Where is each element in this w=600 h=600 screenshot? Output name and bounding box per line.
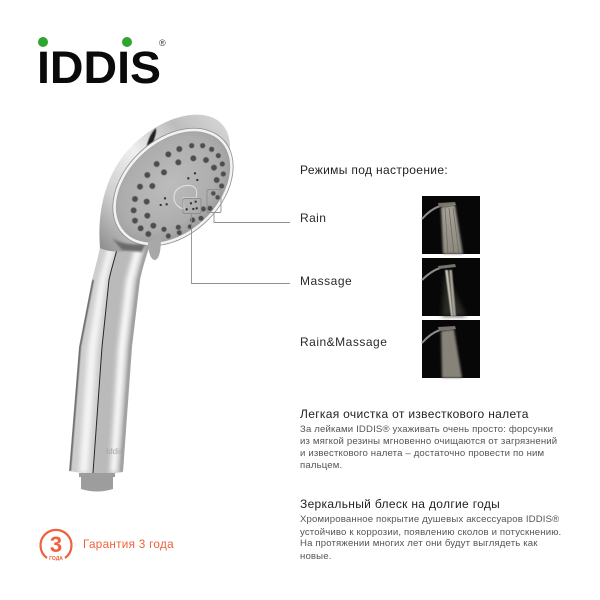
modes heading: Режимы под настроение: [300, 163, 448, 177]
photo: massage mode [422, 258, 480, 316]
section: easy cleaning: пальцем. [300, 460, 342, 471]
selector outline [174, 185, 197, 209]
photo: rain mode [422, 196, 480, 254]
warranty badge: ГОДА [49, 556, 63, 562]
section: mirror shine: Хромированное покрытие душевых аксессуаров IDDIS® [300, 514, 559, 525]
label: Rain: Rain [300, 211, 326, 225]
label: Massage: Massage [300, 274, 352, 288]
section: mirror shine: Зеркальный блеск на долгие годы [300, 497, 500, 511]
section: easy cleaning: и известкового налета – достаточно провести по ним [300, 448, 544, 459]
label: Rain&Massage: Rain&Massage [300, 335, 387, 349]
photo: rain and massage mode [422, 320, 480, 378]
section: mirror shine [300, 497, 564, 562]
section: mirror shine: устойчиво к коррозии, появлению сколов и потускнению. [300, 527, 561, 538]
nozzles [131, 143, 226, 239]
small jets [159, 172, 198, 210]
mode switch tab [148, 236, 161, 260]
section: mirror shine: новые. [300, 551, 332, 562]
section: easy cleaning: За лейками IDDIS® ухаживать очень просто: форсунки [300, 424, 553, 435]
shower head product image [69, 114, 234, 492]
face [94, 109, 252, 265]
warranty text: Гарантия 3 года [83, 538, 174, 551]
face rim [90, 105, 256, 269]
warranty badge: 3 [50, 532, 62, 557]
connector: Massage [183, 198, 290, 284]
warranty badge [40, 530, 72, 562]
connector: Rain [207, 190, 290, 222]
logo: IDDIS: IDDIS [37, 42, 161, 93]
section: easy cleaning: из мягкой резины мгновенно очищаются от загрязнений [300, 436, 557, 447]
section: easy cleaning [300, 407, 560, 471]
thread [79, 473, 115, 492]
handle [69, 246, 148, 473]
logo: IDDIS: ® [159, 38, 166, 48]
section: easy cleaning: Легкая очистка от известкового налета [300, 407, 529, 421]
section: mirror shine: На протяжении многих лет они будут выглядеть как [300, 538, 538, 549]
brand mark: Iddis [106, 447, 123, 456]
back shell [99, 115, 230, 252]
